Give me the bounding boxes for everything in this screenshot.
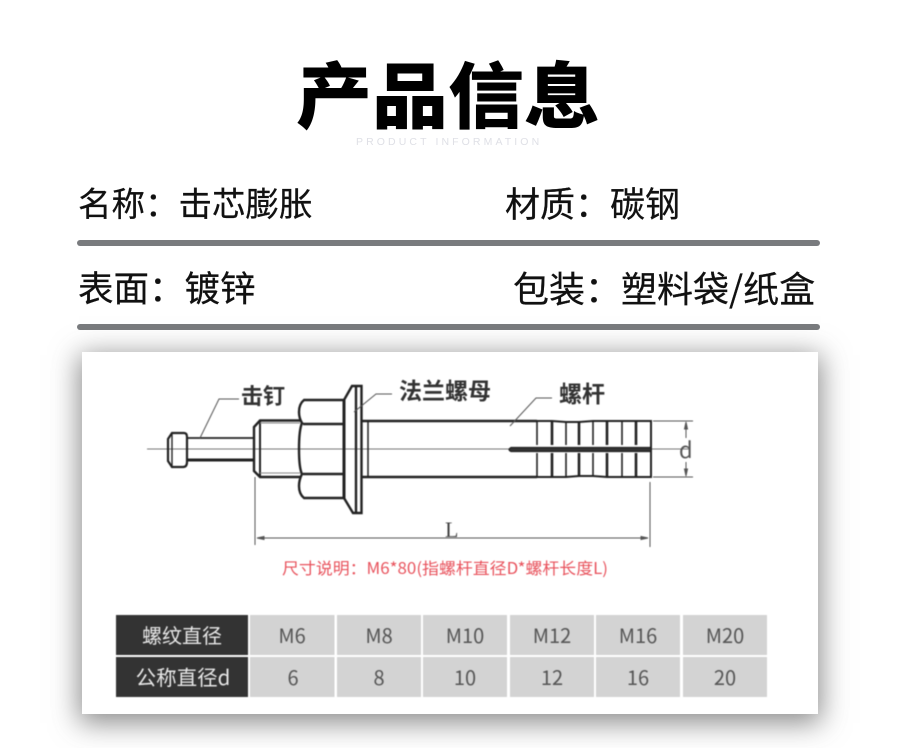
divider 2 <box>77 324 820 330</box>
diagram: expansion anchor <box>147 386 693 547</box>
table row: nominal diameter: 20 <box>714 662 736 691</box>
table row: nominal diameter: 12 <box>541 662 563 691</box>
table row: nominal diameter: 6 <box>287 662 299 691</box>
sleeve <box>254 420 300 477</box>
dimension d <box>653 421 693 477</box>
panel: product diagram and size table <box>82 352 818 714</box>
table row: thread diameter: M10 <box>446 620 484 649</box>
size table <box>116 615 767 697</box>
material: 材质：碳钢 <box>505 177 680 228</box>
table row: nominal diameter <box>116 657 767 697</box>
label: bolt: 螺杆 <box>559 375 605 409</box>
flange nut <box>299 386 362 513</box>
label: L: L <box>445 517 458 542</box>
leader lines <box>200 394 552 438</box>
table row: nominal diameter: 16 <box>627 662 649 691</box>
table row: thread diameter: M12 <box>533 620 571 649</box>
packaging: 包装：塑料袋/纸盒 <box>513 261 815 313</box>
title: 产品信息 <box>296 39 600 143</box>
center line <box>147 448 690 450</box>
table row: nominal diameter: 8 <box>373 662 385 691</box>
label: flange nut: 法兰螺母 <box>399 372 491 406</box>
size note: 尺寸说明：M6*80(指螺杆直径D*螺杆长度L) <box>282 555 608 579</box>
table row: thread diameter: M8 <box>365 620 393 649</box>
anchor bolt <box>362 421 651 477</box>
dimension L <box>255 477 650 547</box>
label: drive pin: 击钉 <box>241 379 285 411</box>
subtitle: PRODUCT INFORMATION <box>356 136 542 148</box>
table row: thread diameter <box>116 615 767 655</box>
table row: thread diameter: M6 <box>278 620 306 649</box>
table row: thread diameter: M20 <box>706 620 744 649</box>
table row: nominal diameter: 10 <box>454 662 476 691</box>
table row: thread diameter: 螺纹直径 <box>142 620 222 649</box>
surface finish: 表面：镀锌 <box>78 261 256 312</box>
table row: nominal diameter: 公称直径d <box>136 661 230 691</box>
divider 1 <box>77 240 820 246</box>
product name: 名称：击芯膨胀 <box>78 177 312 226</box>
label: d: d <box>679 433 693 465</box>
drive pin <box>168 433 253 467</box>
table row: thread diameter: M16 <box>619 620 657 649</box>
